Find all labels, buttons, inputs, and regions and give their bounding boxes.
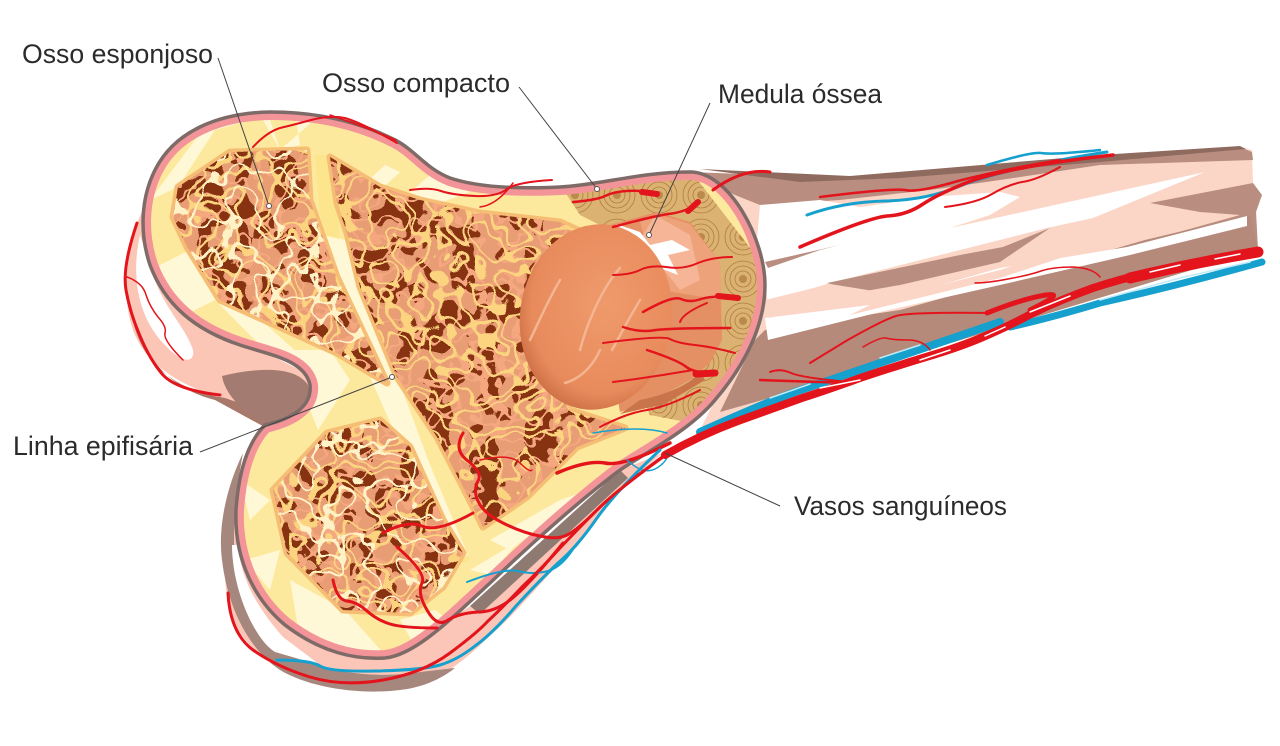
bone marrow: [508, 212, 722, 420]
rim: [143, 112, 765, 658]
back surface of the epiphysis: [126, 205, 663, 692]
shaft of the bone: [690, 146, 1262, 430]
spongy bone halo: [173, 150, 625, 613]
upper vessels on epiphysis: [125, 115, 770, 395]
cut surface with compact rim: [143, 112, 775, 658]
spongy bone texture: [173, 150, 625, 613]
blood vessels in spongy bone: [333, 433, 670, 628]
label: Medula óssea: [646, 79, 882, 238]
label: Osso esponjoso: Osso esponjoso: [22, 39, 213, 69]
rim outline: [143, 112, 765, 658]
label: Osso compacto: [322, 68, 600, 192]
cream radial streaks: [150, 112, 610, 655]
compact bone ring: [567, 180, 757, 421]
vessel highlights: [770, 254, 1250, 398]
label: Linha epifisária: Linha epifisária: [13, 431, 193, 461]
red arteries: [228, 155, 1258, 683]
label: Osso esponjoso: [22, 39, 272, 208]
blood vessels inside marrow: [573, 191, 738, 427]
label: Osso compacto: Osso compacto: [322, 68, 510, 98]
label: Vasos sanguíneos: Vasos sanguíneos: [794, 491, 1007, 521]
label: Linha epifisária: [13, 374, 394, 461]
label: Vasos sanguíneos: [665, 453, 1007, 521]
blue veins: [277, 150, 1262, 671]
label: Medula óssea: Medula óssea: [718, 79, 882, 109]
